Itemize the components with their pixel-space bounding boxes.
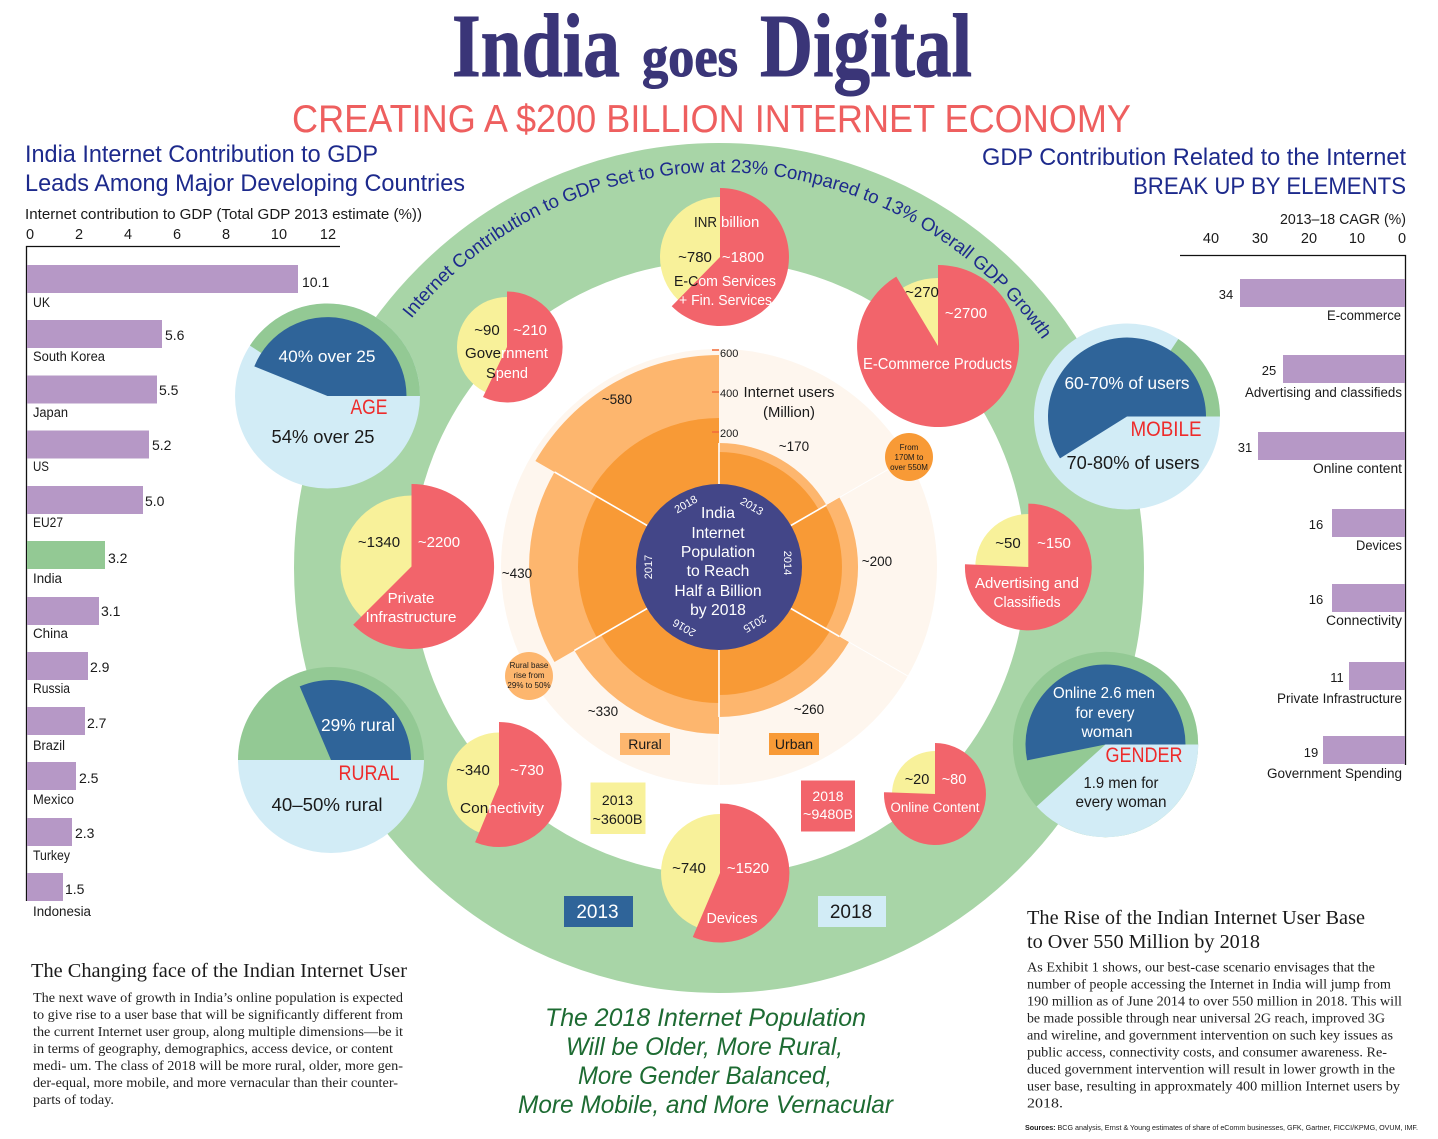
bar chart: CAGR by element: 0 (1398, 231, 1406, 247)
centre disc: Internet (691, 525, 745, 542)
pie: devices: ~1520 (727, 860, 769, 877)
pie: gender: every woman (1076, 794, 1166, 811)
title (452, 0, 972, 96)
pie: online content: Online Content (890, 800, 980, 815)
pie: e-commerce products: E-Commerce Products (863, 356, 1012, 373)
sector values (502, 392, 892, 719)
bar chart: CAGR by element: Private Infrastructure (1277, 691, 1402, 706)
heading: contribution to GDP (25, 141, 465, 197)
legend: 2018: 2018 (830, 902, 872, 923)
bar chart: internet contribution to GDP: 0 (26, 227, 34, 243)
bar chart: CAGR by element: 20 (1301, 231, 1317, 247)
bar chart: internet contribution to GDP: Russia (33, 681, 70, 696)
pie: online content (884, 743, 986, 845)
bar chart: CAGR by element: 16 (1309, 592, 1323, 607)
text block: rise of the user base: The Rise of the Indian Internet User Base (1027, 908, 1365, 929)
total box 2018: 2018 (812, 788, 844, 804)
bar chart: internet contribution to GDP: UK (33, 295, 50, 310)
centre disc: to Reach (687, 563, 749, 580)
legend: 2013: 2013 (576, 902, 619, 923)
pie: government spend: Government (465, 345, 549, 362)
pie: age: 54% over 25 (272, 427, 374, 447)
text block: rise of the user base: number of people accessing the Internet in India will jump from (1027, 977, 1392, 992)
text block: changing face: der-equal, more mobile, and more vernacular than their counter- (33, 1075, 398, 1090)
total box 2018 (801, 780, 855, 832)
bar chart: CAGR by element: 34 (1219, 287, 1233, 302)
pie: e-commerce products (857, 265, 1019, 427)
callout: rural growth: Rural base (510, 661, 549, 670)
text block: changing face: medi- um. The class of 2018 will be more rural, older, more gen- (33, 1058, 403, 1073)
pie: e-commerce products: ~2700 (945, 305, 987, 322)
scale ticks: 600 (720, 348, 738, 360)
bar chart: CAGR by element: 19 (1304, 745, 1318, 760)
pie: government spend: ~210 (513, 322, 547, 339)
sector 2016 (574, 567, 719, 734)
heading: contribution to GDP: Leads Among Major Developing Countries (25, 170, 465, 197)
pie: gender: GENDER (1106, 744, 1182, 767)
centre disc: 2014 (781, 551, 793, 575)
bar chart: CAGR by element: 25 (1262, 363, 1276, 378)
centre disc: India (701, 505, 735, 522)
text block: changing face: parts of today. (33, 1092, 114, 1107)
pie: gender (1013, 652, 1198, 837)
pie: private infrastructure: Private (388, 590, 434, 607)
bar chart: internet contribution to GDP: Brazil (33, 738, 65, 753)
bar chart: internet contribution to GDP: 3.2 (108, 550, 128, 566)
bar chart: internet contribution to GDP: 8 (222, 227, 230, 243)
callout: rural growth (505, 652, 553, 700)
radial chart: internet users (501, 348, 937, 785)
callout: urban growth: 170M to (895, 453, 924, 462)
heading: contribution to GDP: India Internet Contribution to GDP (25, 141, 378, 168)
pie: connectivity: ~340 (456, 762, 490, 779)
heading: break up by elements: GDP Contribution Related to the Internet (982, 144, 1406, 171)
bar chart: CAGR by element: Online content (1313, 461, 1402, 476)
pie: gender: 1.9 men for (1084, 775, 1158, 792)
legend: urban: Urban (775, 736, 813, 752)
text block: rise of the user base: and wireline, and government intervention on such key issues as (1027, 1028, 1393, 1043)
centre disc: 2013 (738, 496, 765, 518)
bar chart: CAGR by element: 11 (1330, 670, 1344, 685)
bar chart: CAGR by element: Connectivity (1326, 613, 1402, 628)
bar chart: CAGR by element: Advertising and classifieds (1245, 385, 1402, 400)
bar chart: CAGR by element (1180, 212, 1406, 781)
sector 2015 (719, 567, 849, 717)
pie: rural: RURAL (338, 762, 400, 785)
bar chart: CAGR by element: 2013–18 CAGR (%) (1280, 212, 1406, 228)
pie: rural: 40–50% rural (272, 795, 382, 815)
centre disc: 2017 (643, 555, 655, 579)
text block: rise of the user base: As Exhibit 1 shows, our best-case scenario envisages that the (1027, 960, 1375, 975)
centre disc: 2015 (741, 612, 768, 634)
green ring with curved caption: Internet Contribution to GDP Set to Grow at 23% Compared to 13% Overall GDP Growth (402, 159, 1050, 339)
centre disc: 2016 (671, 616, 698, 638)
closing statement: More Mobile, and More Vernacular (518, 1091, 895, 1119)
pie: advertising and classifieds: Classifieds (994, 594, 1060, 611)
bar chart: internet contribution to GDP: 4 (124, 227, 132, 243)
total box 2013 (590, 782, 646, 834)
bar chart: internet contribution to GDP: 5.6 (165, 327, 185, 343)
bar chart: internet contribution to GDP: 1.5 (65, 881, 85, 897)
closing statement: Will be Older, More Rural, (566, 1033, 843, 1061)
legend: 2013 (564, 896, 633, 927)
bar chart: CAGR by element: 30 (1252, 231, 1268, 247)
pie: devices: Devices (706, 910, 758, 927)
sources: Sources: BCG analysis, Ernst & Young estimates of share of eComm businesses, GFK, Gartner, FICCI/KPMG, OVUM, IMF. (1025, 1123, 1418, 1132)
internet users label: Internet users (744, 384, 834, 401)
sector values: ~430 (502, 566, 532, 581)
bar chart: internet contribution to GDP: 3.1 (101, 603, 121, 619)
sector 2014 (719, 498, 858, 636)
sector values: ~330 (588, 704, 618, 719)
internet users label: (Million) (763, 404, 815, 421)
text block: rise of the user base (1027, 908, 1402, 1111)
heading: break up by elements (982, 144, 1406, 200)
total box 2018: ~9480B (803, 806, 853, 822)
text block: changing face: The Changing face of the Indian Internet User (31, 961, 408, 982)
pie: gender: for every (1076, 705, 1135, 722)
title: goes (642, 26, 738, 89)
bar chart: internet contribution to GDP: 6 (173, 227, 181, 243)
bar chart: internet contribution to GDP: India (33, 571, 62, 586)
pie: rural: 29% rural (321, 715, 395, 735)
text block: rise of the user base: to Over 550 Million by 2018 (1027, 932, 1260, 953)
bar chart: internet contribution to GDP: 2.3 (75, 825, 95, 841)
bar chart: internet contribution to GDP: Japan (33, 405, 68, 420)
pie: advertising and classifieds: ~150 (1037, 535, 1071, 552)
bar chart: CAGR by element: 31 (1238, 440, 1252, 455)
pie: online content: ~20 (905, 772, 929, 788)
pie: gender: woman (1080, 724, 1132, 741)
text block: changing face: to give rise to a user base that will be significantly different from (33, 1007, 404, 1022)
legend: urban (769, 733, 819, 755)
callout: rural growth: rise from (513, 671, 545, 680)
bar chart: internet contribution to GDP: 2.5 (79, 770, 99, 786)
pie: private infrastructure: ~2200 (418, 534, 460, 551)
pie: gender: Online 2.6 men (1053, 685, 1155, 702)
closing statement: More Gender Balanced, (578, 1062, 832, 1090)
sector 2018 (535, 355, 719, 567)
bar chart: CAGR by element: 16 (1309, 517, 1323, 532)
pie: government spend (457, 291, 563, 402)
bar chart: internet contribution to GDP: 10 (271, 227, 287, 243)
bar chart: CAGR by element: 10 (1349, 231, 1365, 247)
pie: advertising and classifieds: ~50 (995, 535, 1021, 552)
heading: break up by elements: BREAK UP BY ELEMENTS (1133, 173, 1406, 200)
pie: devices: ~740 (672, 860, 706, 877)
scale ticks: 200 (720, 428, 738, 440)
legend: rural: Rural (628, 736, 662, 752)
pie: mobile: MOBILE (1130, 418, 1202, 441)
pie: age: AGE (350, 396, 388, 419)
pie: E-Com services: E-Com Services (674, 273, 776, 290)
text block: rise of the user base: 2018. (1027, 1096, 1063, 1111)
legend: rural (620, 733, 670, 755)
pie: advertising and classifieds (965, 504, 1092, 630)
callout: rural growth: 29% to 50% (507, 681, 551, 690)
callout: urban growth: over 550M (890, 463, 928, 472)
closing statement: The 2018 Internet Population (545, 1004, 866, 1032)
sector 2017 (529, 472, 719, 662)
pie: E-Com services: INR (694, 215, 717, 231)
text block: rise of the user base: user base, resulting in approxmately 400 million Internet users by (1027, 1079, 1400, 1094)
text block: changing face (31, 961, 408, 1107)
bar chart: internet contribution to GDP: Internet contribution to GDP (Total GDP 2013 estimate (%)) (25, 207, 422, 223)
bar chart: internet contribution to GDP: 12 (320, 227, 336, 243)
bar chart: internet contribution to GDP: 5.0 (145, 493, 165, 509)
text block: rise of the user base: duced government intervention will result in lower growth in the (1027, 1062, 1395, 1077)
total box 2013: 2013 (602, 792, 633, 808)
pie: online content: ~80 (942, 772, 966, 788)
sector values: ~580 (602, 392, 632, 407)
pie: rural (238, 667, 424, 853)
text block: changing face: in terms of geography, demographics, access device, or content (33, 1041, 393, 1056)
bar chart: internet contribution to GDP: China (33, 626, 68, 641)
bar chart: internet contribution to GDP: Indonesia (33, 904, 91, 919)
pie: age: 40% over 25 (278, 347, 376, 366)
pie: devices (661, 804, 789, 942)
bar chart: internet contribution to GDP: 2.9 (90, 659, 110, 675)
pie: advertising and classifieds: Advertising and (975, 575, 1079, 592)
callout: urban growth: From (900, 443, 919, 452)
centre disc: 2018 (673, 494, 700, 516)
total box 2013: ~3600B (592, 811, 642, 827)
pie: government spend: Spend (486, 365, 528, 382)
centre disc: Half a Billion (674, 583, 762, 600)
pie: government spend: ~90 (474, 322, 500, 339)
pie: e-commerce products: ~270 (905, 284, 939, 301)
sector values: ~170 (779, 439, 809, 454)
bar chart: internet contribution to GDP: 5.5 (159, 382, 179, 398)
pie: E-Com services: ~780 (678, 249, 712, 266)
closing statement (518, 1004, 895, 1119)
bar chart: internet contribution to GDP (25, 207, 422, 919)
internet users label (744, 384, 834, 421)
centre disc: by 2018 (690, 602, 746, 619)
centre disc: Population (681, 544, 755, 561)
text block: changing face: The next wave of growth in India’s online population is expected (33, 990, 403, 1005)
pie: mobile: 70-80% of users (1066, 453, 1200, 473)
bar chart: internet contribution to GDP: Mexico (33, 792, 74, 807)
text block: rise of the user base: 190 million as of June 2014 to over 550 million in 2018. This will (1027, 994, 1402, 1009)
pie: E-Com services: + Fin. Services (679, 292, 772, 309)
text block: rise of the user base: public access, connectivity costs, and consumer awareness. Re- (1027, 1045, 1387, 1060)
green ring with curved caption (313, 143, 1126, 974)
bar chart: internet contribution to GDP: 10.1 (302, 274, 329, 290)
pie: age (235, 303, 420, 488)
pie: connectivity: ~730 (510, 762, 544, 779)
bar chart: CAGR by element: 40 (1203, 231, 1219, 247)
subtitle: CREATING A $200 BILLION INTERNET ECONOMY (292, 98, 1131, 141)
bar chart: internet contribution to GDP: Turkey (33, 848, 70, 863)
sector values: ~200 (862, 554, 892, 569)
bar chart: CAGR by element: Devices (1356, 538, 1402, 553)
pie: E-Com services (660, 188, 789, 326)
centre disc (636, 484, 802, 650)
bar chart: internet contribution to GDP: 5.2 (152, 437, 172, 453)
pie: private infrastructure: ~1340 (358, 534, 400, 551)
bar chart: internet contribution to GDP: 2.7 (87, 715, 107, 731)
sector 2013 (719, 443, 826, 567)
pie: connectivity (447, 722, 562, 847)
pie: mobile: 60-70% of users (1064, 373, 1190, 393)
bar chart: internet contribution to GDP: EU27 (33, 515, 63, 530)
pie: E-Com services: billion (721, 214, 759, 231)
bar chart: internet contribution to GDP: 2 (75, 227, 83, 243)
pie: private infrastructure: Infrastructure (366, 609, 456, 626)
legend: 2018 (818, 896, 886, 927)
callout: urban growth (885, 433, 933, 481)
bar chart: internet contribution to GDP: South Korea (33, 349, 105, 364)
pie: private infrastructure (340, 484, 494, 649)
scale ticks: 400 (720, 388, 738, 400)
sector values: ~260 (794, 702, 824, 717)
pie: E-Com services: ~1800 (722, 249, 764, 266)
pie: mobile (1034, 324, 1220, 510)
scale ticks (712, 348, 738, 440)
bar chart: CAGR by element: E-commerce (1327, 308, 1401, 323)
bar chart: internet contribution to GDP: US (33, 459, 49, 474)
text block: rise of the user base: be made possible through near universal 2G reach, improved 3G (1027, 1011, 1385, 1026)
pie: connectivity: Connectivity (460, 800, 545, 817)
bar chart: CAGR by element: Government Spending (1267, 766, 1402, 781)
text block: changing face: the current Internet user group, along multiple dimensions—be it (33, 1024, 403, 1039)
